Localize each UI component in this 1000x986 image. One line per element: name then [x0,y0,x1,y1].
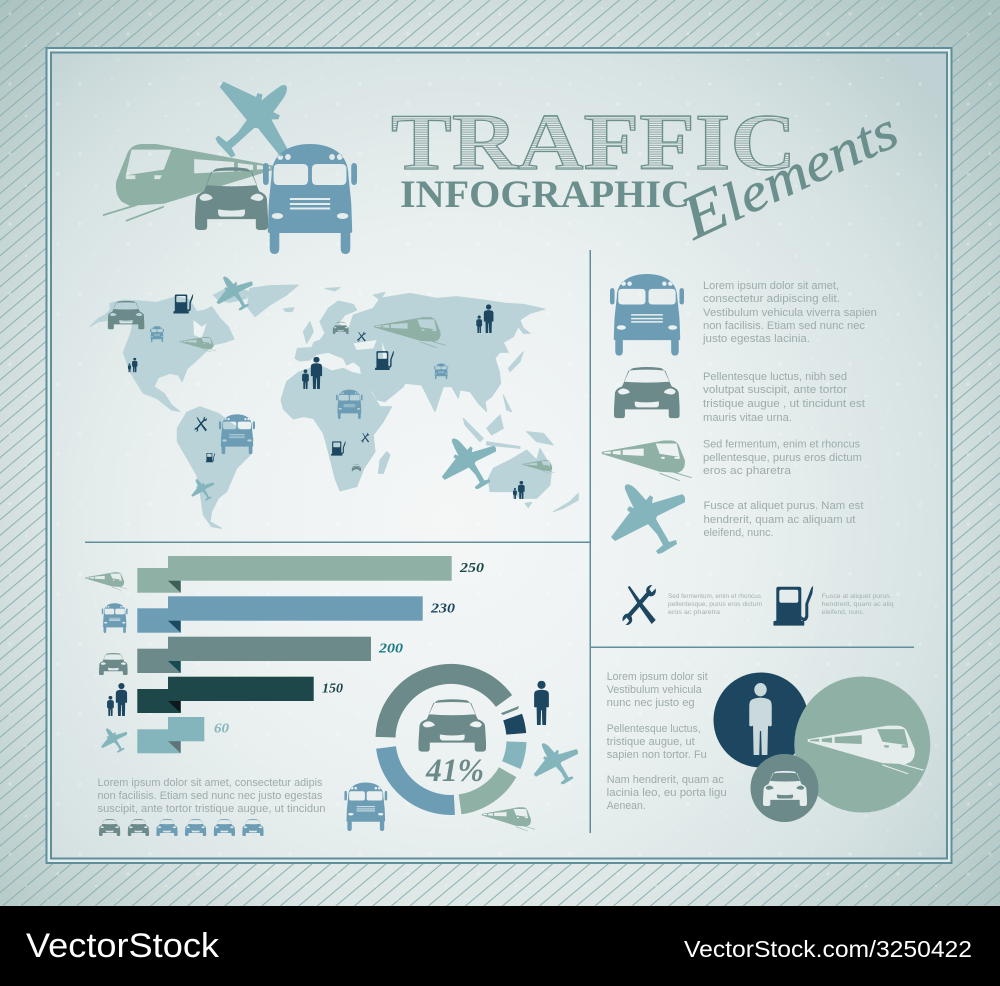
donut icon: plane [534,743,578,784]
plane description: hendrerit, quam ac aliquam ut [704,514,856,526]
subtitle: Infographic: INFOGRAPHIC [400,173,690,216]
bottom-right caption: Lorem ipsum dolor sit [607,671,708,683]
map icon: fuel pump, Middle East [375,351,394,370]
train description: eros ac pharetra [703,465,792,477]
bar: car 200: 200 [378,642,403,656]
framed panel [46,48,952,863]
section dividers [85,250,914,833]
bottom-right caption: sapien non tortor. Fu [607,749,707,761]
car description: mauris vitae urna. [703,412,792,424]
tools description: pellentesque, purus eros dictum [668,602,762,608]
hero vehicle illustration [103,69,357,254]
bus description [702,280,877,345]
footer url: VectorStock.com/3250422 [684,936,972,962]
map icon: plane, South America [191,479,214,501]
legend icon: tools [622,585,656,625]
map icon: train, Asia [374,317,446,348]
bottom-right caption: Aenean. [607,800,646,812]
footer logo: VectorStock [26,927,220,965]
footer bar [0,906,1000,986]
car pictogram row [99,819,264,836]
bus description: non facilisis. Etiam sed nunc nec [703,320,865,332]
map icon: plane, Canada [216,276,253,311]
car description: Pellentesque luctus, nibh sed [703,371,847,383]
bottom-right caption: Vestibulum vehicula [607,684,703,696]
bar: car 200 [99,637,403,675]
bar: people 150: 150 [322,682,343,696]
map icon: train, North America [179,337,216,352]
bottom-left caption: non facilisis. Etiam sed nunc nec justo egestas [98,790,323,802]
hero train [103,144,274,222]
bus description: Vestibulum vehicula viverra sapien [703,307,877,319]
donut chart [344,674,578,831]
bar: plane 60 [101,717,229,753]
donut centre car [418,699,486,752]
inland seas [193,320,388,358]
plane description: eleifend, nunc. [704,527,774,539]
bar: plane 60: 60 [214,722,229,736]
bar: bus 230 [102,596,455,633]
bubble chart [714,672,930,822]
fuel pump description: Fusce at aliquet purus. [822,594,892,600]
tools description: eros ac pharetra [668,610,721,616]
fuel pump description: hendrerit, quam ac aliq [822,602,894,608]
train description: Sed fermentum, enim et rhoncus [703,438,860,450]
bottom-right caption: Nam hendrerit, quam ac [607,774,724,786]
hero plane [204,69,301,169]
map icon: car, North America [108,301,144,329]
map icon: people, North Africa [302,357,322,389]
map icon: fuel pump, Africa [331,441,346,456]
hero car [195,167,268,230]
bar: train 250: 250 [459,561,484,576]
plane description [704,500,864,539]
subtitle: Elements script: Elements [670,94,908,253]
plane description: Fusce at aliquet purus. Nam est [704,500,864,512]
map icon: bus, North America [150,326,164,342]
car description: tristique augue , ut tincidunt est [703,398,865,410]
bus description: Lorem ipsum dolor sit amet, [703,280,839,292]
bottom-right caption: tristique augue, ut [607,736,695,748]
map icon: fuel pump, South America [206,453,215,462]
tools description: Sed fermentum, enim et rhoncus [668,594,761,600]
tools description [668,594,762,616]
bus description: justo egestas lacinia. [702,333,810,345]
map icon: fuel pump, Canada [173,294,193,314]
donut segments [386,674,516,805]
bottom-right caption: nunc nec justo eg [607,697,695,709]
map icon: car, Europe [333,322,349,334]
map icon: bus, South America [219,414,255,454]
bottom-left caption: Lorem ipsum dolor sit amet, consectetur adipis [98,777,323,789]
map icon: plane, Indian Ocean [442,438,496,489]
map icon: bus, China [434,363,448,379]
train description [703,438,862,477]
bottom-right caption: Pellentesque luctus, [607,723,701,735]
bottom-right caption [607,671,727,812]
bubble: train [794,676,930,812]
map icon: people, Australia [513,481,525,499]
car description: volutpat suscipit, ante tortor [703,384,847,396]
donut icon: bus [344,782,387,831]
map icon: tools, South America [195,417,207,432]
legend icon: plane [611,484,685,554]
bottom-left caption [98,777,326,815]
map icon: tools, Europe [357,332,366,342]
legend icon: train [602,440,692,481]
bottom-right caption: lacinia leo, eu porta ligu [607,787,727,799]
legend icon: car [614,367,680,418]
donut icon: train [482,807,535,831]
bubble: car [750,754,818,822]
title: Traffic: TRAFFIC [391,98,796,187]
donut sliver [501,706,519,715]
donut percentage: 41% [425,753,484,789]
panel: vehicle legend [602,274,894,626]
bar: bus 230: 230 [430,602,455,616]
map icon: car, Africa [352,464,361,471]
fuel pump description [822,594,894,616]
bar: train 250 [85,556,484,593]
legend icon: fuel pump [773,586,813,626]
map icon: tools, Africa [361,433,369,443]
map icon: train, Australia [522,460,555,474]
legend icon: bus [610,274,684,356]
bubble: person [714,672,808,768]
bus description: consectetur adipiscing elit. [703,293,840,305]
map icon: people, Russia [476,304,493,333]
bottom-left caption: suscipit, ante tortor tristique augue, ut tincidun [98,803,326,815]
map icon: bus, Africa [336,390,363,419]
map icon: people, North America [128,358,137,372]
bar chart [85,556,484,753]
bar: people 150 [107,677,343,716]
continents [90,285,578,528]
car description [703,371,865,424]
train description: pellentesque, purus eros dictum [703,452,862,464]
fuel pump description: eleifend, nunc. [822,610,865,616]
donut icon: person [534,681,549,725]
world map [90,276,578,528]
hero bus [263,144,357,254]
